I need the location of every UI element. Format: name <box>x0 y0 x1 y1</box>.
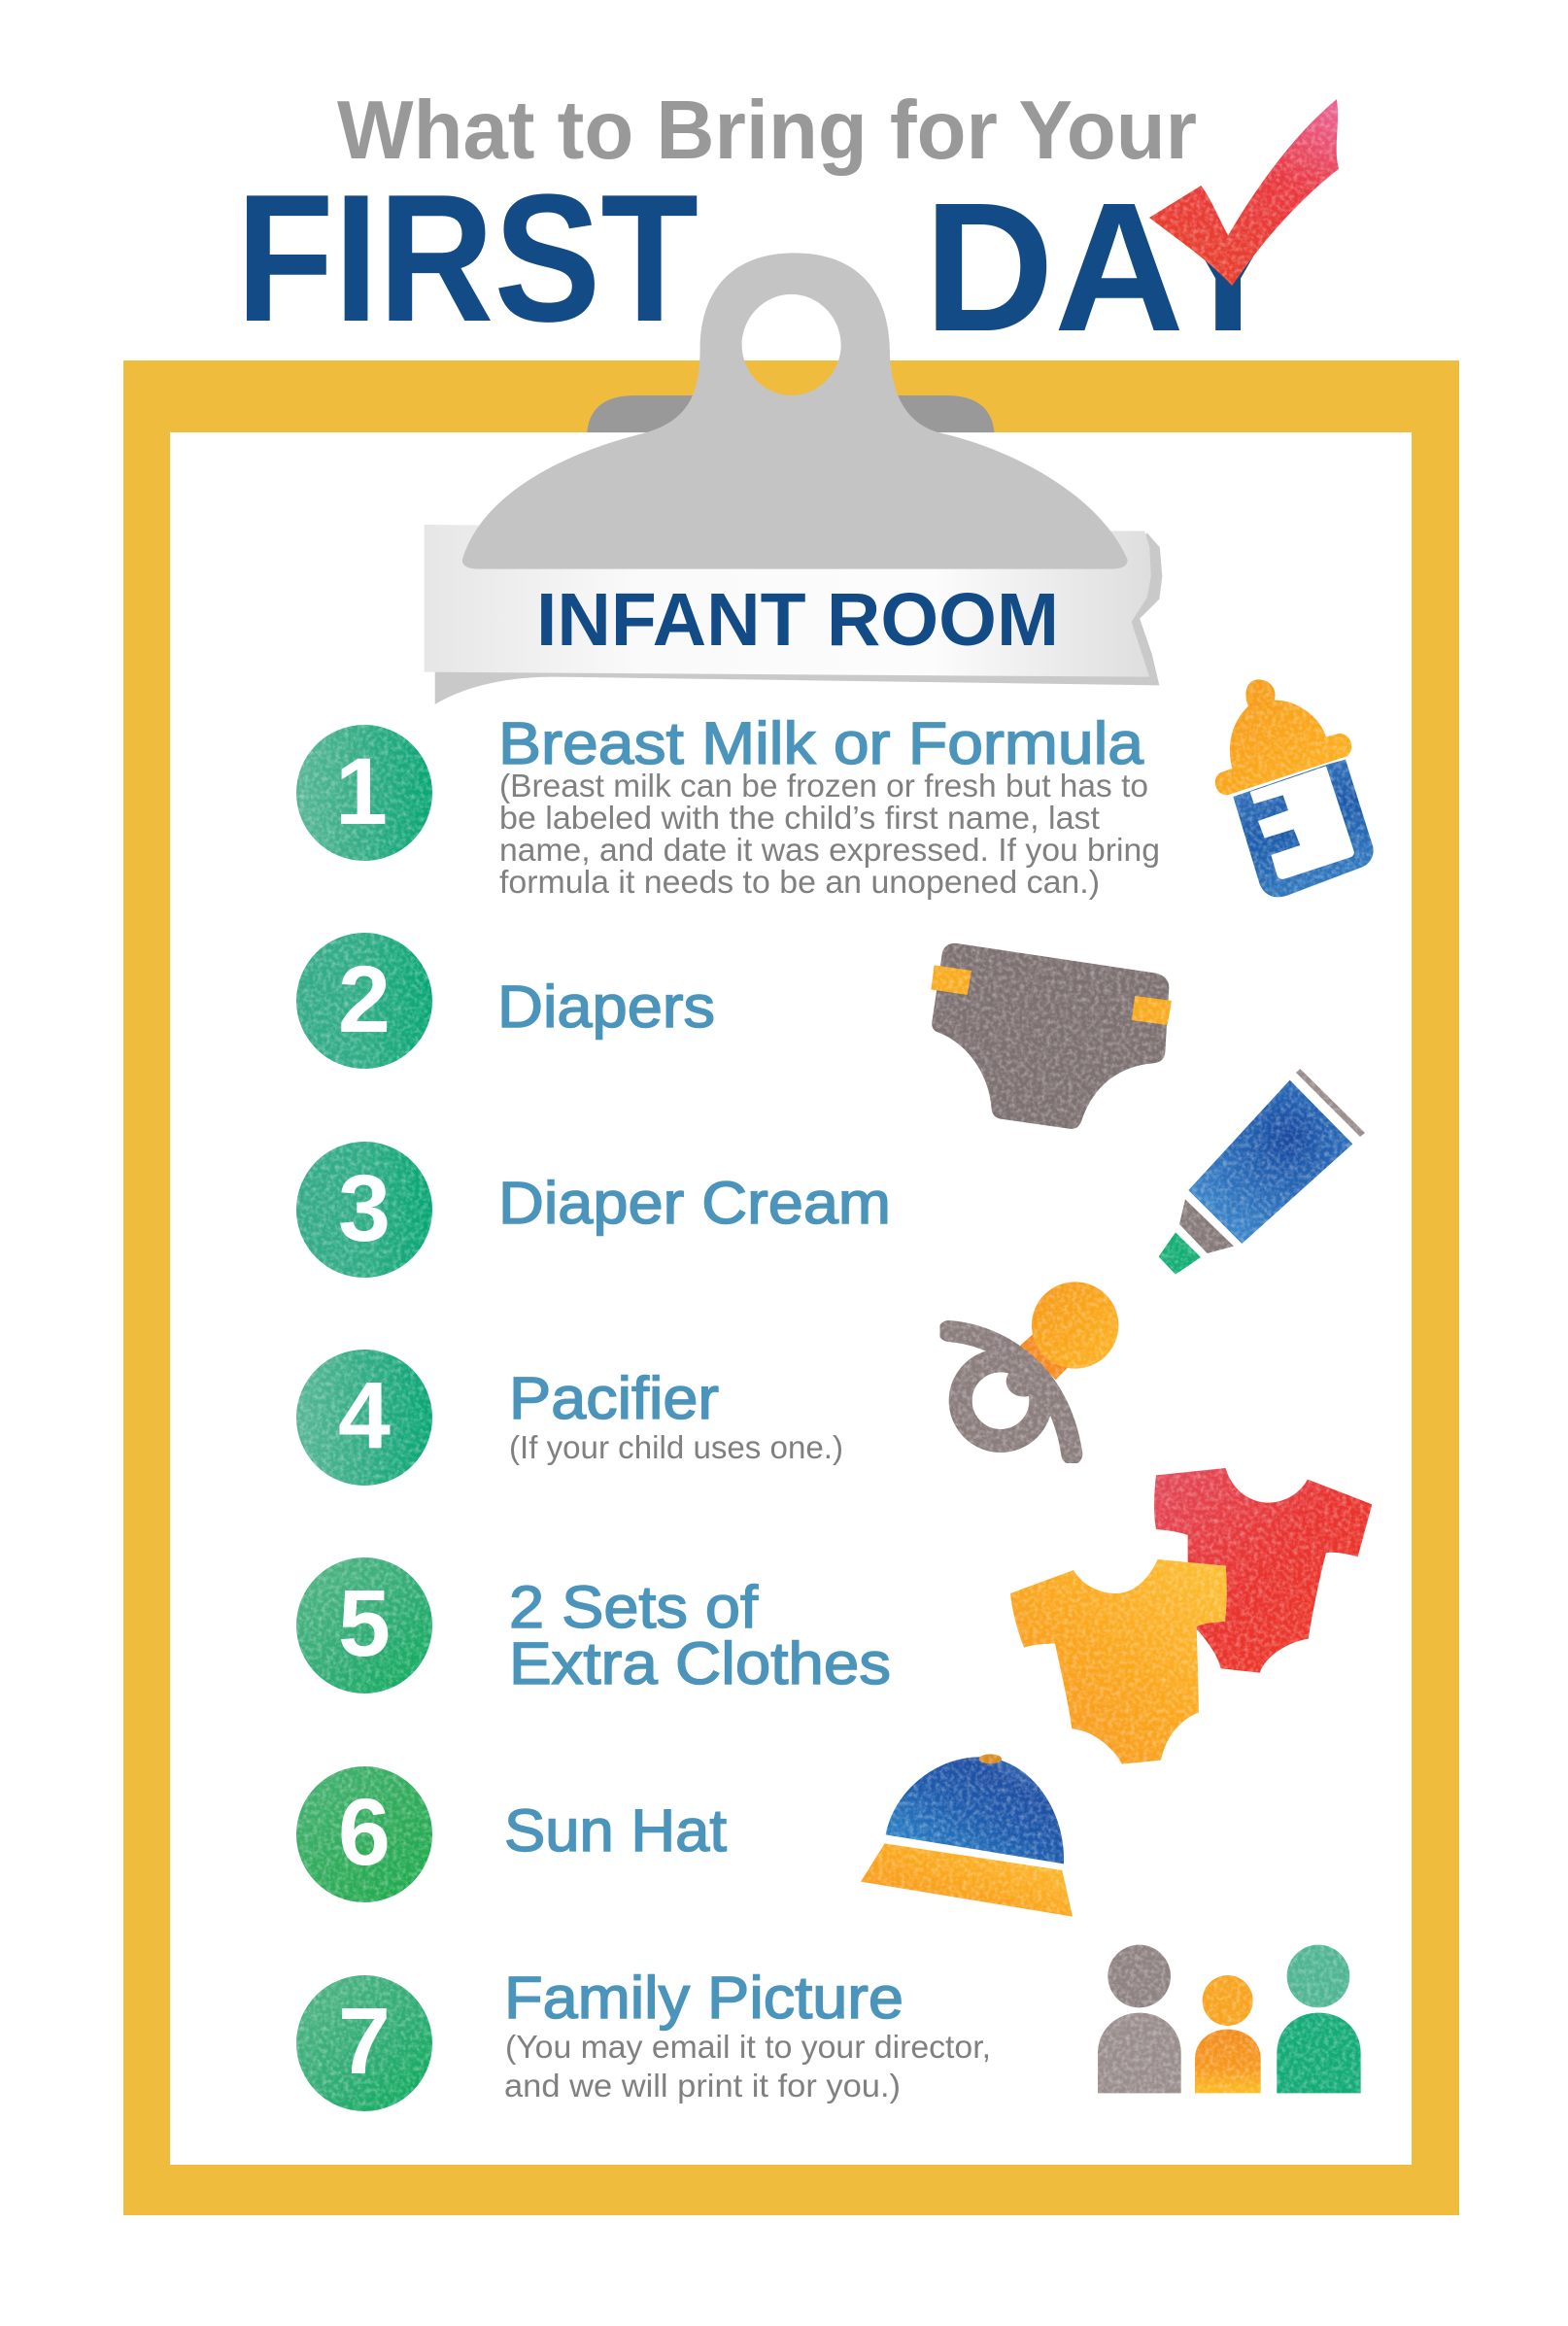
item 4: text: (If your child uses one.) <box>509 1429 843 1465</box>
icon: pacifier <box>949 1282 1118 1454</box>
item 3: text: Diaper Cream <box>498 1170 891 1236</box>
item 5: number badge <box>296 1557 432 1693</box>
title: day: DA <box>924 165 1184 370</box>
clipboard clip back tabs <box>587 395 995 432</box>
item 5: text: Extra Clothes <box>509 1630 891 1696</box>
item 2: number badge: 2 <box>338 946 391 1052</box>
icon: diaper <box>931 943 1172 1129</box>
item 1: text: Breast Milk or Formula <box>498 710 1143 776</box>
banner: infant room ribbon <box>425 525 1162 704</box>
item 2: number badge <box>296 933 432 1069</box>
item 7: text <box>504 1965 991 2104</box>
item 6: text: Sun Hat <box>504 1797 727 1864</box>
item 3: number badge: 3 <box>338 1155 391 1261</box>
item 6: number badge <box>296 1766 432 1902</box>
item 1: number badge <box>296 725 432 861</box>
item 5: number badge: 5 <box>338 1570 391 1676</box>
item 4: text <box>509 1365 843 1465</box>
item 1: text: formula it needs to be an unopened can.) <box>499 864 1100 900</box>
item 1: text: (Breast milk can be frozen or fresh but has to <box>499 768 1148 804</box>
item 1: text: be labeled with the child’s first name, last <box>499 800 1100 836</box>
item 7: text: and we will print it for you.) <box>504 2068 901 2104</box>
icon: family <box>1098 1945 1361 2093</box>
icon: sun hat <box>861 1754 1073 1917</box>
item 7: number badge: 7 <box>338 1988 391 2094</box>
clipboard clip <box>462 253 1128 569</box>
title: day: Y <box>1170 165 1286 370</box>
icon: cream tube <box>1159 1069 1365 1275</box>
item 4: text: Pacifier <box>509 1365 719 1431</box>
clipboard board <box>123 360 1459 2215</box>
item 4: number badge <box>296 1350 432 1486</box>
item 1: text: name, and date it was expressed. If you bring <box>499 832 1160 868</box>
banner label: INFANT ROOM <box>536 578 1059 662</box>
item 2: text: Diapers <box>497 974 715 1040</box>
icon: baby bottle <box>1215 679 1374 897</box>
item 1: text <box>498 710 1160 900</box>
icon: baby clothes <box>1010 1468 1372 1764</box>
item 6: number badge: 6 <box>338 1779 391 1885</box>
item 4: number badge: 4 <box>338 1362 391 1468</box>
item 7: text: Family Picture <box>504 1965 903 2031</box>
title: what to bring for your: What to Bring for Your <box>337 85 1197 177</box>
item 7: number badge <box>296 1975 432 2111</box>
icon: red check mark <box>1149 99 1339 286</box>
item 1: number badge: 1 <box>335 738 388 844</box>
item 5: text: 2 Sets of <box>509 1574 759 1640</box>
item 7: text: (You may email it to your director, <box>505 2029 991 2065</box>
item 3: number badge <box>296 1142 432 1278</box>
title: first: FIRST <box>236 156 699 359</box>
item 5: text <box>509 1574 891 1696</box>
